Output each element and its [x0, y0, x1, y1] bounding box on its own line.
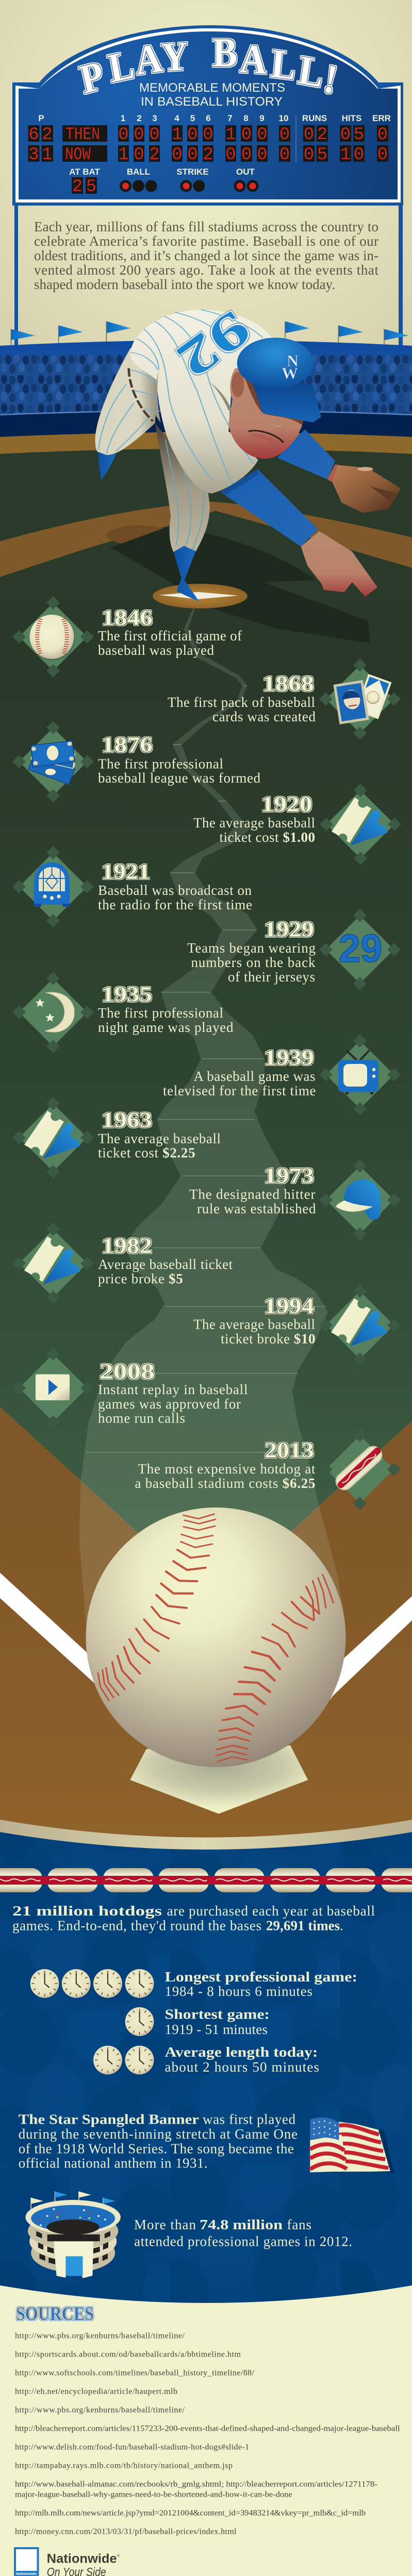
- intro paragraph: shaped modern baseball into the sport we know today.: [34, 277, 335, 292]
- sources list: [15, 2332, 400, 2536]
- timeline: 1920: 1920: [261, 793, 312, 817]
- timeline: 1868: The first pack of baseball: [168, 694, 315, 710]
- icon: ticket: [332, 798, 388, 845]
- icon: batting helmet: [336, 1179, 381, 1219]
- glove arm: [277, 429, 401, 513]
- icon: baseball: [30, 615, 75, 660]
- icon: dollar bills: [28, 741, 75, 785]
- anthem fact: was first played: [203, 2112, 296, 2127]
- timeline: 2013: The most expensive hotdog at: [138, 1461, 316, 1477]
- timeline: 1921: 1921: [102, 860, 150, 884]
- icon: radio: [34, 862, 70, 907]
- sources list: major-league-baseball-why-games-need-to-be-shortened-and-how-it-can-be-done: [15, 2490, 292, 2499]
- scoreboard row: now: 0: [187, 145, 198, 165]
- hotdog row: [0, 1868, 412, 1892]
- scoreboard row: now: [28, 145, 388, 165]
- scoreboard row: now: 0: [134, 145, 144, 165]
- scoreboard column labels: 2: [137, 113, 142, 123]
- game length facts: about 2 hours 50 minutes: [165, 2059, 319, 2075]
- scoreboard row: now: 0: [377, 145, 388, 165]
- timeline: 1935: [12, 972, 234, 1053]
- timeline: 1868: 1868: [262, 672, 314, 696]
- timeline: 2008: home run calls: [98, 1411, 185, 1426]
- scoreboard row: now: 0: [172, 145, 183, 165]
- timeline: 1973: rule was established: [197, 1201, 316, 1216]
- scoreboard row: then: 1: [225, 125, 236, 145]
- scoreboard row: then: 0: [149, 125, 160, 145]
- sources list: http://eh.net/encyclopedia/article/haupert.mlb: [15, 2387, 177, 2396]
- timeline: 1994: [193, 1284, 401, 1366]
- game length facts: [165, 1969, 357, 2075]
- timeline: 1846: 1846: [102, 606, 153, 630]
- sources list: http://money.cnn.com/2013/03/31/pf/baseball-prices/index.html: [15, 2528, 237, 2536]
- standing leg: [155, 423, 210, 602]
- icon: ticket: [24, 1236, 80, 1284]
- timeline: 1868: cards was created: [212, 709, 316, 724]
- intro paragraph: Each year, millions of fans fill stadiums across the country to: [34, 219, 378, 234]
- cap logo: [282, 351, 299, 382]
- scoreboard row: now: 0: [304, 145, 314, 165]
- scoreboard column labels: 7: [227, 113, 233, 123]
- icon: stadium: [25, 2192, 121, 2278]
- stadium flags: [11, 321, 408, 347]
- scoreboard row: then: 0: [257, 125, 268, 145]
- scoreboard row: then: 6: [28, 125, 39, 145]
- subtitle: IN BASEBALL HISTORY: [141, 95, 283, 109]
- at bat, ball, strike, out counters: AT BAT: [69, 167, 101, 177]
- timeline: 2013: a baseball stadium costs $6.25: [135, 1476, 316, 1491]
- timeline: 1876: [12, 721, 261, 803]
- outer dirt: [0, 1407, 412, 1855]
- hotdog fact: games. End-to-end, they'd round the bases: [12, 1918, 261, 1933]
- anthem fact: [19, 2112, 298, 2171]
- scoreboard row: then: THEN: [65, 125, 100, 145]
- scoreboard row: then: 5: [354, 125, 364, 145]
- Nationwide logo: [14, 2547, 120, 2576]
- attendance fact: fans: [287, 2217, 311, 2232]
- timeline: 1939: 1939: [264, 1046, 314, 1070]
- timeline: 1982: 1982: [102, 1234, 152, 1258]
- timeline: 2013: [135, 1429, 401, 1510]
- scoreboard column labels: 8: [243, 113, 249, 123]
- scoreboard column labels: 3: [152, 113, 157, 123]
- intro paragraph: vented almost 200 years ago. Take a look at the events that: [34, 262, 378, 278]
- scoreboard row: now: 2: [149, 145, 160, 165]
- timeline: 2008: 2008: [100, 1360, 155, 1384]
- blue stats panel: [0, 1832, 412, 2303]
- game length clocks: [30, 1969, 155, 2076]
- at bat, ball, strike, out counters: STRIKE: [176, 167, 209, 177]
- scoreboard row: now: 0: [354, 145, 364, 165]
- icon: moon and stars: [35, 992, 74, 1032]
- scoreboard row: now: 0: [241, 145, 252, 165]
- timeline: 2013: 2013: [265, 1439, 314, 1463]
- home plate: [130, 1745, 308, 1814]
- cream warning track band: [0, 1820, 412, 1855]
- timeline: 1929: of their jerseys: [228, 969, 315, 985]
- timeline: 1929: [187, 909, 401, 990]
- scoreboard row: then: 0: [304, 125, 314, 145]
- hotdog fact: 21 million hotdogs: [12, 1903, 162, 1919]
- sources list: http://sportscards.about.com/od/baseballcards/a/bbtimeline.htm: [15, 2350, 241, 2359]
- sources list: http://tampabay.rays.mlb.com/tb/history/national_anthem.jsp: [15, 2462, 233, 2470]
- anthem fact: The Star Spangled Banner: [19, 2112, 199, 2127]
- timeline: 1921: the radio for the first time: [98, 897, 252, 912]
- scoreboard row: then: [28, 125, 388, 145]
- timeline: 1939: televised for the first time: [163, 1083, 316, 1098]
- giant baseball: [86, 1507, 345, 1767]
- timeline: 1935: The first professional: [98, 1005, 223, 1021]
- intro paragraph: oldest traditions, and it’s changed a lot since the game was in-: [34, 248, 378, 263]
- scoreboard column labels: 4: [174, 113, 179, 123]
- scoreboard column labels: 6: [206, 113, 211, 123]
- scoreboard row: now: 1: [42, 145, 53, 165]
- scoreboard panel: [12, 25, 403, 206]
- scoreboard column labels: 1: [121, 113, 125, 123]
- attendance fact: [134, 2217, 352, 2249]
- timeline: 1963: [12, 1097, 221, 1178]
- scoreboard row: then: 1: [172, 125, 183, 145]
- Nationwide logo: Nationwide: [47, 2551, 117, 2566]
- timeline: 1846: baseball was played: [98, 642, 215, 658]
- scoreboard row: now: 0: [225, 145, 236, 165]
- hotdog fact: are purchased each year at baseball: [167, 1903, 375, 1919]
- timeline: 1920: [193, 784, 401, 865]
- timeline: 1876: The first professional: [98, 756, 223, 772]
- timeline: 1876: baseball league was formed: [98, 770, 261, 786]
- scoreboard row: now: 1: [118, 145, 129, 165]
- icon: american flag: [310, 2117, 394, 2174]
- timeline: 1982: [12, 1223, 233, 1304]
- subtitle: [139, 81, 285, 109]
- timeline: 1939: [163, 1034, 401, 1115]
- timeline: 2008: games was approved for: [98, 1396, 241, 1412]
- timeline: 1920: ticket cost $1.00: [220, 829, 315, 845]
- timeline: 1994: The average baseball: [193, 1317, 315, 1332]
- scoreboard digit cells: [28, 125, 388, 162]
- scoreboard row: then: 0: [134, 125, 144, 145]
- scoreboard row: then: 0: [241, 125, 252, 145]
- scoreboard row: now: 3: [28, 145, 39, 165]
- sources list: http://www.baseball-almanac.com/recbooks/rb_gmlg.shtml; http://bleacherreport.com/articles/1271178-: [15, 2480, 377, 2489]
- scoreboard row: then: 0: [203, 125, 213, 145]
- jersey number: 92: [167, 299, 261, 389]
- scoreboard row: then: 0: [377, 125, 388, 145]
- timeline: 1929: Teams began wearing: [187, 940, 316, 956]
- timeline: 1963: The average baseball: [98, 1131, 221, 1146]
- at bat, ball, strike, out counters: OUT: [236, 167, 255, 177]
- icon: ticket: [24, 1111, 80, 1159]
- head and face: [228, 368, 312, 459]
- back arm: [95, 348, 159, 481]
- timeline: 2008: [12, 1347, 248, 1429]
- cap logo: N: [287, 351, 299, 370]
- intro paragraph: celebrate America’s favorite pastime. Baseball is one of our: [34, 233, 378, 249]
- icon: hotdog: [341, 1451, 377, 1485]
- page background: sky: [0, 0, 412, 464]
- cap: [237, 337, 321, 422]
- sources heading: SOURCES: [16, 2303, 94, 2325]
- Nationwide logo: Nationwide: [16, 2571, 37, 2576]
- game length facts: 1984 - 8 hours 6 minutes: [165, 1984, 312, 1999]
- timeline: 1973: [189, 1159, 401, 1241]
- icon: replay button: [36, 1375, 70, 1400]
- timeline: 1921: [12, 846, 252, 927]
- timeline: 1982: Average baseball ticket: [98, 1257, 233, 1272]
- scoreboard row: then: 0: [340, 125, 351, 145]
- timeline: 1920: The average baseball: [193, 815, 315, 831]
- player shadow: [106, 526, 371, 643]
- anthem fact: during the seventh-inning stretch at Game One: [19, 2126, 298, 2142]
- at bat, ball, strike, out counters: 2: [72, 177, 83, 197]
- icon: jersey number 29: 29: [339, 927, 382, 971]
- Nationwide logo: ®: [117, 2554, 120, 2558]
- timeline: 1929: numbers on the back: [191, 955, 316, 970]
- at bat, ball, strike, out counters: BALL: [127, 167, 150, 177]
- timeline: 1935: 1935: [102, 983, 152, 1007]
- scoreboard column labels: 10: [279, 113, 288, 123]
- scoreboard column labels: RUNS: [302, 113, 327, 123]
- hand: [301, 531, 377, 597]
- infield dirt arc: [0, 502, 412, 577]
- sources list: http://www.softschools.com/timelines/baseball_history_timeline/88/: [15, 2369, 255, 2378]
- timeline: 1935: night game was played: [98, 1020, 234, 1035]
- attendance fact: attended professional games in 2012.: [134, 2233, 352, 2249]
- timeline winding path: [80, 609, 344, 1623]
- icon: baseball cards: [333, 674, 392, 724]
- timeline: 1868: [168, 658, 401, 740]
- title: PLAY BALL!: [76, 30, 341, 103]
- scoreboard column labels: HITS: [342, 113, 361, 123]
- scoreboard row: now: 0: [279, 145, 290, 165]
- game length facts: Average length today:: [165, 2044, 318, 2060]
- timeline: 1963: ticket cost $2.25: [98, 1145, 195, 1160]
- scoreboard row: now: 1: [340, 145, 351, 165]
- scoreboard column labels: P: [38, 113, 44, 123]
- attendance fact: More than: [134, 2217, 196, 2232]
- timeline: 1921: Baseball was broadcast on: [98, 883, 252, 898]
- game length facts: 1919 - 51 minutes: [165, 2022, 268, 2037]
- timeline: 1939: A baseball game was: [194, 1069, 316, 1084]
- timeline: 1963: 1963: [102, 1109, 152, 1132]
- timeline: 1876: 1876: [102, 734, 153, 757]
- scoreboard row: now: NOW: [65, 145, 91, 165]
- hotdog fact: 29,691 times.: [266, 1918, 343, 1933]
- pitcher mound: [153, 584, 248, 608]
- sources list: http://bleacherreport.com/articles/1157233-200-events-that-defined-shaped-and-changed-major-league-baseball: [15, 2425, 400, 2433]
- scoreboard row: then: 0: [187, 125, 198, 145]
- at bat, ball, strike, out counters: [69, 167, 259, 197]
- scoreboard column labels: 5: [190, 113, 195, 123]
- game length facts: Shortest game:: [165, 2007, 270, 2022]
- timeline: 1994: ticket broke $10: [221, 1331, 316, 1347]
- timeline: 1846: [12, 596, 242, 677]
- scoreboard row: now: 2: [203, 145, 213, 165]
- scoreboard row: now: 5: [317, 145, 327, 165]
- subtitle: MEMORABLE MOMENTS: [139, 81, 285, 95]
- hotdog fact: [12, 1903, 375, 1933]
- attendance fact: 74.8 million: [200, 2217, 283, 2232]
- stadium wall and crowd: [0, 340, 412, 459]
- icon: ticket: [331, 1298, 387, 1346]
- front sleeve: [220, 469, 318, 547]
- sources list: http://mlb.mlb.com/news/article.jsp?ymd=20121004&content_id=39483214&vkey=pr_mlb&c_id=mlb: [15, 2509, 366, 2518]
- anthem fact: of the 1918 World Series. The song became the: [19, 2141, 294, 2156]
- scoreboard posts: [14, 204, 403, 348]
- sources list: http://www.delish.com/food-fun/baseball-stadium-hot-dogs#slide-1: [15, 2443, 249, 2452]
- timeline: 1929: 1929: [264, 918, 314, 942]
- infield grass: [0, 449, 412, 1602]
- cap logo: W: [282, 364, 298, 382]
- foul lines: [0, 1573, 412, 1700]
- scoreboard column labels: ERR: [372, 113, 391, 123]
- timeline: 1846: The first official game of: [98, 628, 242, 643]
- timeline: 1982: price broke $5: [98, 1271, 183, 1286]
- sources list: http://www.pbs.org/kenburns/baseball/timeline/: [15, 2406, 185, 2415]
- timeline: 1973: The designated hitter: [189, 1187, 316, 1202]
- scoreboard column labels: [38, 113, 391, 123]
- pitcher illustration: [95, 299, 401, 602]
- timeline: 2008: Instant replay in baseball: [98, 1382, 248, 1397]
- scoreboard row: then: 2: [42, 125, 53, 145]
- scoreboard row: then: 2: [317, 125, 327, 145]
- footer cream background: [0, 2267, 412, 2576]
- anthem fact: official national anthem in 1931.: [19, 2156, 208, 2171]
- timeline connector lines: [86, 686, 326, 1452]
- scoreboard row: now: 0: [257, 145, 268, 165]
- game length facts: Longest professional game:: [165, 1969, 357, 1985]
- scoreboard row: then: 0: [279, 125, 290, 145]
- scoreboard column labels: 9: [259, 113, 265, 123]
- at bat, ball, strike, out counters: 5: [86, 177, 96, 197]
- scoreboard row: then: 0: [118, 125, 129, 145]
- torso with pinstripes: [129, 310, 273, 494]
- sources list: http://www.pbs.org/kenburns/baseball/timeline/: [15, 2332, 185, 2341]
- icon: television: [338, 1050, 378, 1094]
- intro paragraph: [34, 219, 378, 292]
- timeline: 1973: 1973: [264, 1164, 314, 1188]
- timeline: 1994: 1994: [264, 1295, 314, 1318]
